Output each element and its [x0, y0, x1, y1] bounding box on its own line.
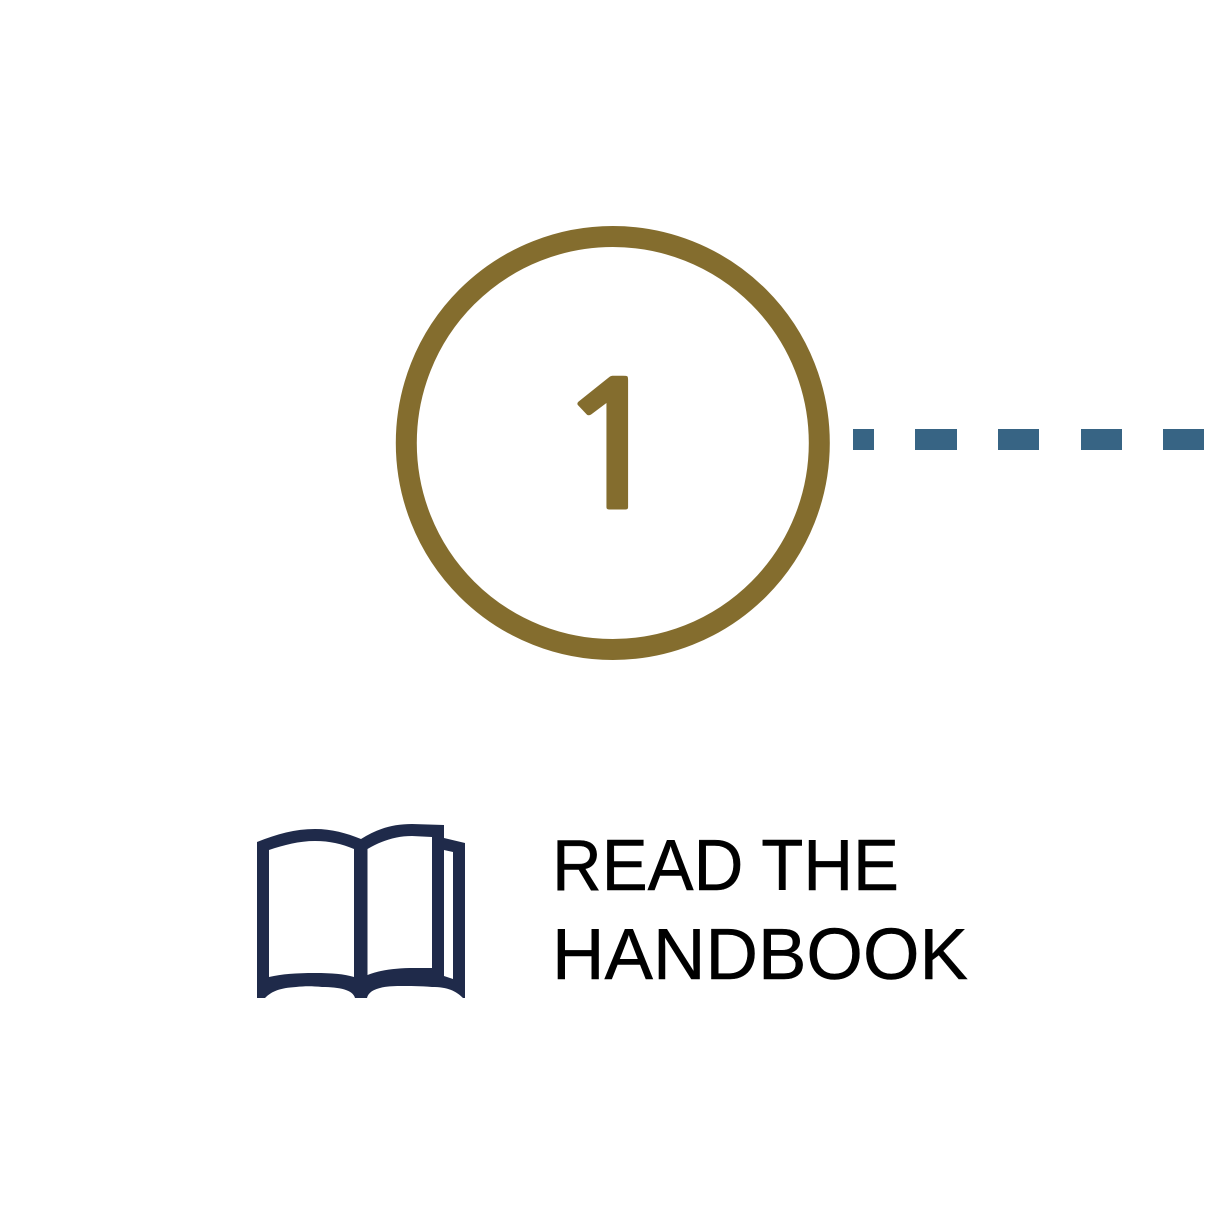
- step number: 1: [551, 362, 674, 536]
- icon: open book: [257, 824, 465, 998]
- label: read the handbook: HANDBOOK: [552, 915, 968, 995]
- dashed connector: [853, 429, 1204, 450]
- step circle: [406, 236, 819, 650]
- label: read the handbook: [552, 826, 968, 995]
- label: read the handbook: READ THE: [552, 826, 899, 906]
